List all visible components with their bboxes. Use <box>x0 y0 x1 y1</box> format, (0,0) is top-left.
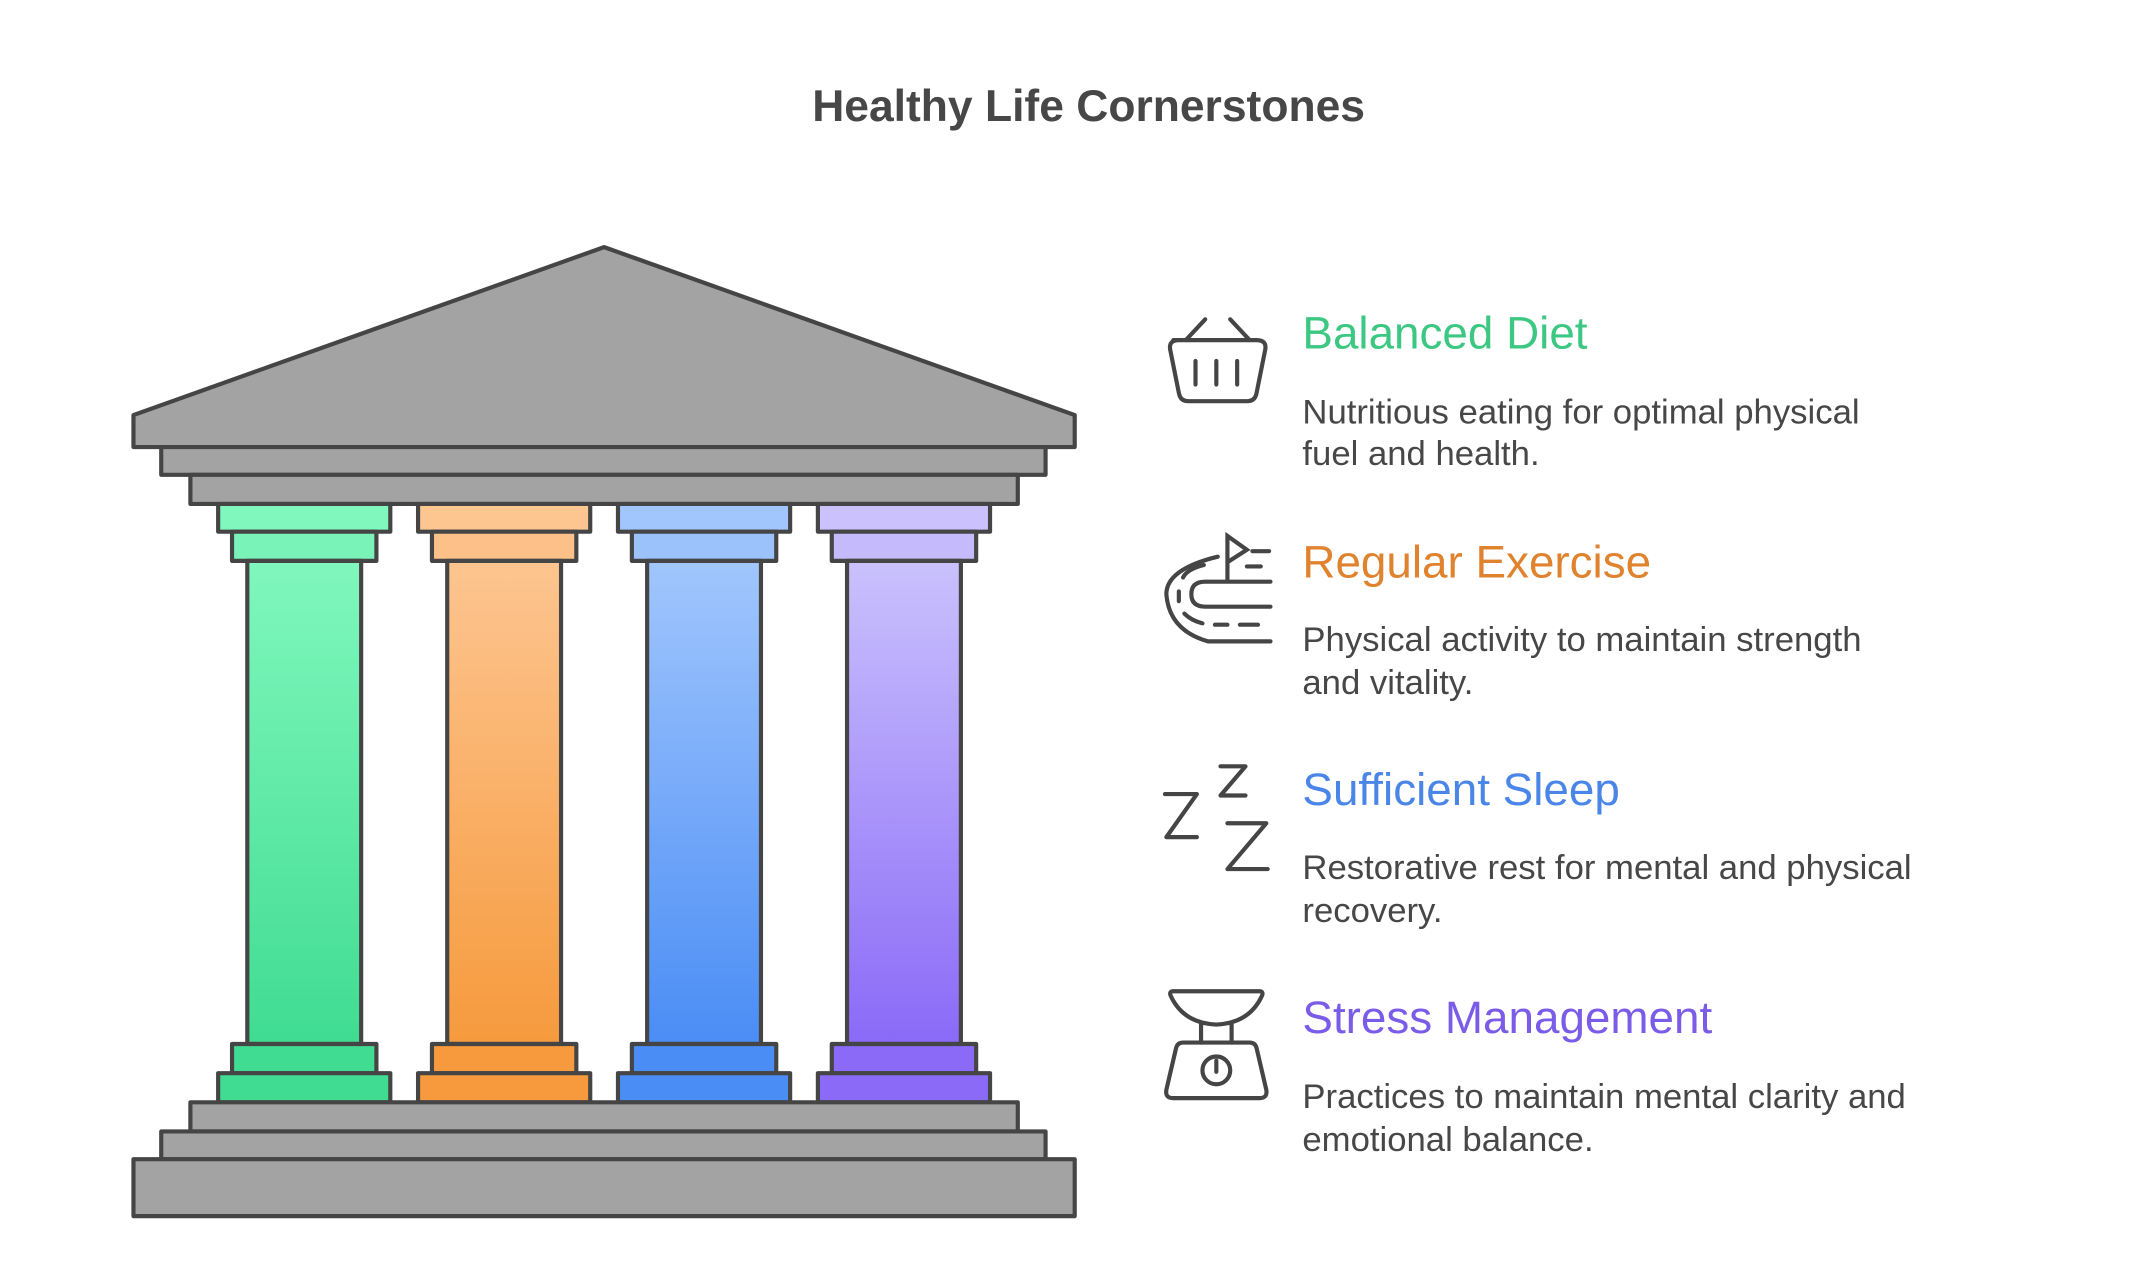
item: Regular Exercise: and vitality. <box>1302 664 1473 702</box>
base <box>133 1102 1075 1216</box>
icon: basket <box>1170 319 1265 401</box>
item: Stress Management: Stress Management <box>1302 992 1713 1043</box>
item: Sufficient Sleep: Sufficient Sleep <box>1302 764 1620 815</box>
roof <box>133 247 1075 447</box>
item: Balanced Diet <box>1302 307 1860 473</box>
icon: zzz <box>1165 766 1268 869</box>
icon: track <box>1166 536 1270 641</box>
column: green <box>218 504 390 1102</box>
item: Balanced Diet: fuel and health. <box>1302 435 1540 473</box>
item: Balanced Diet: Balanced Diet <box>1302 307 1588 358</box>
column: orange <box>418 504 590 1102</box>
title: Healthy Life Cornerstones <box>812 82 1365 131</box>
column: blue <box>618 504 790 1102</box>
item: Stress Management: emotional balance. <box>1302 1121 1594 1159</box>
item: Sufficient Sleep: recovery. <box>1302 892 1442 930</box>
item: Regular Exercise <box>1302 537 1862 702</box>
item: Stress Management <box>1302 992 1906 1159</box>
item: Regular Exercise: Physical activity to maintain strength <box>1302 621 1862 659</box>
item: Sufficient Sleep: Restorative rest for mental and physical <box>1302 849 1912 887</box>
icon: scale <box>1166 991 1267 1098</box>
item: Sufficient Sleep <box>1302 764 1912 930</box>
temple <box>133 247 1075 1216</box>
column: purple <box>818 504 990 1102</box>
item: Stress Management: Practices to maintain mental clarity and <box>1302 1078 1906 1116</box>
item: Regular Exercise: Regular Exercise <box>1302 537 1651 588</box>
item: Balanced Diet: Nutritious eating for optimal physical <box>1302 393 1860 431</box>
